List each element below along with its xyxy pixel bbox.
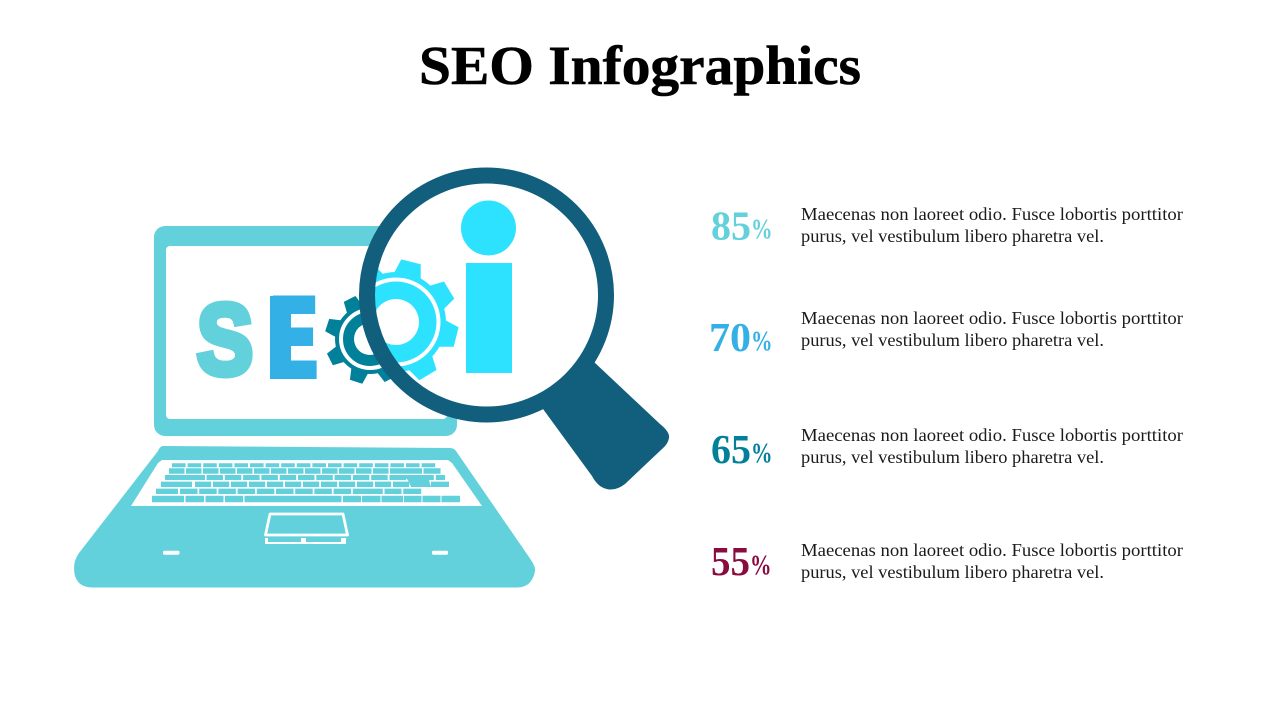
stat row: 65%: Maecenas non laoreet odio. Fusce lobortis porttitor bbox=[801, 425, 1183, 445]
magnifier lens background bbox=[374, 183, 598, 407]
stat row: 55% bbox=[711, 538, 1183, 584]
title: SEO Infographics bbox=[419, 35, 861, 96]
stat row: 70%: Maecenas non laoreet odio. Fusce lobortis porttitor bbox=[801, 308, 1183, 328]
stat row: 55%: purus, vel vestibulum libero pharetra vel. bbox=[801, 562, 1104, 582]
icon: info i bbox=[461, 200, 516, 373]
stat row: 65% bbox=[711, 425, 1183, 472]
stat row: 85%: 85 bbox=[711, 202, 751, 248]
letter E bbox=[270, 275, 318, 400]
stat row: 55%: 55 bbox=[711, 538, 750, 584]
stat row: 65%: % bbox=[751, 438, 772, 470]
letter E: E bbox=[270, 275, 318, 400]
stat row: 55%: Maecenas non laoreet odio. Fusce lobortis porttitor bbox=[801, 540, 1183, 560]
stat row: 55%: % bbox=[750, 550, 772, 582]
laptop base bbox=[74, 446, 535, 588]
stat row: 70% bbox=[709, 308, 1183, 360]
stat row: 85% bbox=[711, 202, 1183, 248]
stat row: 70%: % bbox=[751, 326, 772, 358]
stat row: 85%: purus, vel vestibulum libero pharetra vel. bbox=[801, 226, 1104, 246]
stat row: 65%: 65 bbox=[711, 426, 751, 472]
stat row: 85%: % bbox=[751, 214, 772, 246]
stat row: 65%: purus, vel vestibulum libero pharetra vel. bbox=[801, 447, 1104, 467]
letter S: S bbox=[197, 284, 253, 396]
illustration: laptop with magnifier bbox=[74, 176, 669, 588]
laptop screen bbox=[154, 226, 457, 436]
stat row: 70%: 70 bbox=[709, 314, 751, 360]
stat row: 70%: purus, vel vestibulum libero pharetra vel. bbox=[801, 330, 1104, 350]
icon: large cyan gear bbox=[375, 259, 458, 380]
magnifier ring and handle bbox=[367, 176, 669, 490]
icon: small teal gear bbox=[324, 293, 416, 385]
stat row: 85%: Maecenas non laoreet odio. Fusce lobortis porttitor bbox=[801, 204, 1183, 224]
